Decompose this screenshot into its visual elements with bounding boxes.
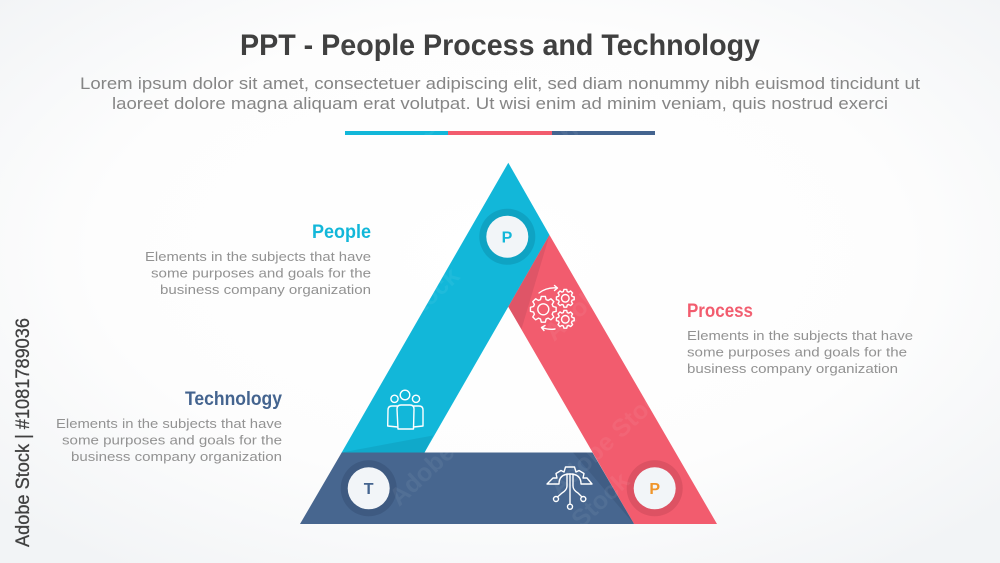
subtitle: laoreet dolore magna aliquam erat volutpat. Ut wisi enim ad minim veniam, quis nostrud exerci (112, 94, 888, 113)
icon: tech gear circuit (547, 467, 592, 509)
stock watermark: Adobe Stock (39, 382, 170, 506)
stock id label: Adobe Stock | #1081789036 (12, 318, 34, 547)
band: technology (300, 452, 634, 524)
badge: people: P (502, 230, 513, 246)
band: people (342, 163, 550, 452)
stock watermark: Adobe Stock (334, 262, 465, 386)
panel: technology text: Technology (185, 389, 282, 410)
stock watermark: Adobe Stock (384, 387, 515, 511)
tricolor divider (345, 131, 655, 135)
panel: process text: some purposes and goals for the (687, 344, 907, 360)
stock watermark: Adobe Stock (699, 82, 830, 206)
badge: process (627, 460, 683, 516)
stock watermark: Adobe Stock (712, 409, 843, 533)
fold shadow: process (508, 235, 550, 329)
subtitle: Lorem ipsum dolor sit amet, consectetuer adipiscing elit, sed diam nonummy nibh euismod tincidunt ut (80, 74, 920, 93)
subtitle (80, 74, 920, 113)
badge: people (479, 209, 535, 265)
stock watermark: Adobe Stock (539, 222, 670, 346)
fold shadow: technology (573, 452, 634, 524)
panel: technology text: Elements in the subjects that have (56, 416, 282, 431)
icon: gears with arrows (530, 286, 574, 330)
triangle diagram (300, 163, 717, 524)
panel: process text (687, 301, 913, 376)
panel: people text: some purposes and goals for the (151, 266, 371, 280)
stock watermark: Adobe Stock (669, 267, 800, 391)
band: process (508, 235, 717, 524)
panel: people text (145, 222, 371, 297)
stock watermark: Adobe Stock (169, 102, 300, 226)
badge: technology (341, 460, 397, 516)
fold shadow: people (342, 436, 433, 452)
panel: process text: Process (687, 301, 753, 322)
panel: process text: business company organization (687, 361, 898, 376)
icon: people group (388, 390, 423, 429)
stock watermark: Adobe Stock (194, 222, 325, 346)
stock watermark: Adobe Stock (829, 107, 960, 231)
stock watermark: Adobe Stock (839, 442, 970, 563)
stock watermark: Adobe Stock (544, 377, 675, 501)
panel: people text: People (312, 222, 371, 243)
stock watermark: Adobe Stock (349, 77, 480, 201)
panel: technology text (56, 389, 282, 464)
stock watermark: Adobe Stock (24, 72, 155, 196)
stock watermark: Adobe Stock (519, 57, 650, 181)
panel: technology text: business company organization (71, 449, 282, 464)
title: PPT - People Process and Technology (240, 29, 760, 62)
panel: people text: business company organization (160, 282, 371, 297)
panel: process text: Elements in the subjects that have (687, 328, 913, 343)
badge: technology: T (364, 481, 374, 498)
badge: process: P (649, 481, 660, 498)
panel: people text: Elements in the subjects that have (145, 249, 371, 264)
panel: technology text: some purposes and goals for the (62, 432, 282, 448)
